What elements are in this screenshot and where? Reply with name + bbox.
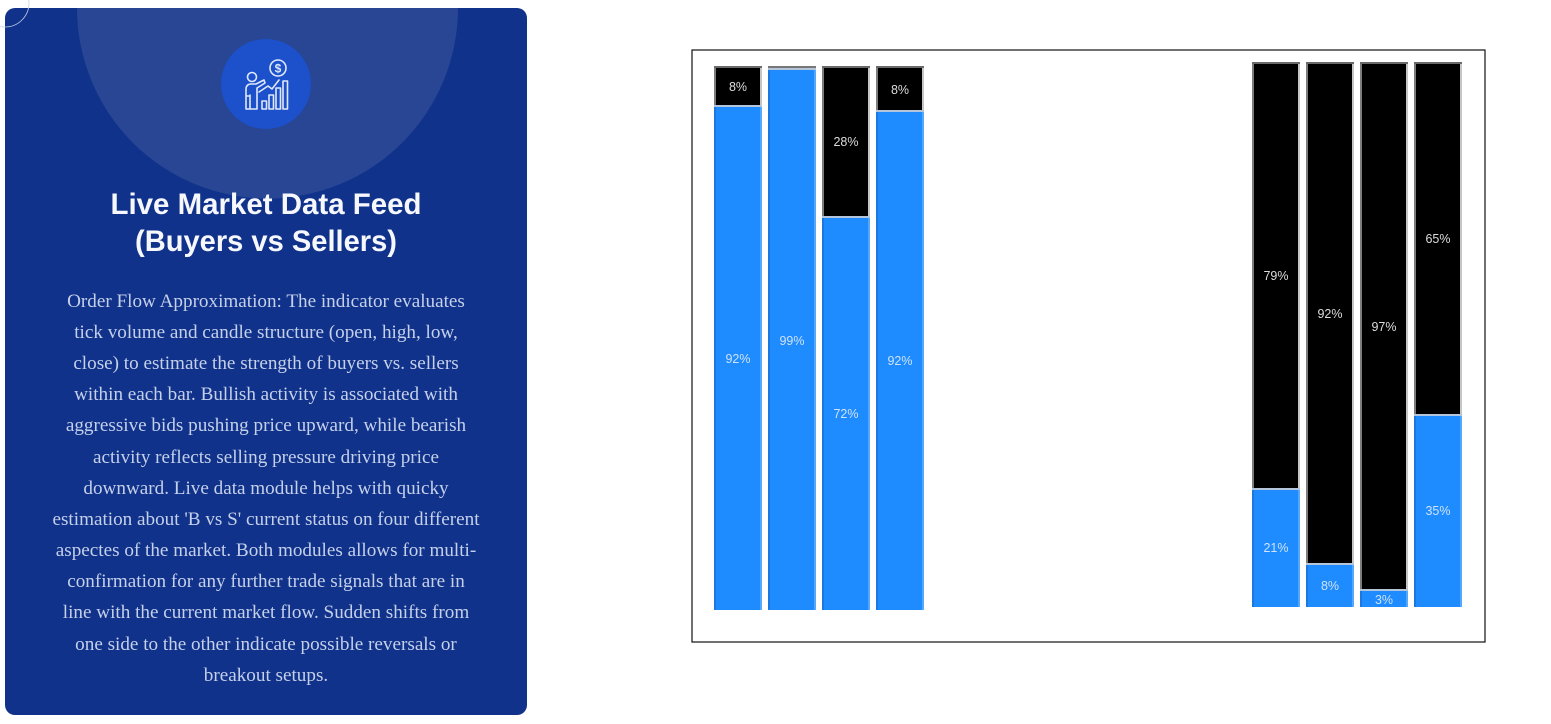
description text: within each bar. Bullish activity is associated with	[74, 384, 458, 405]
description text: tick volume and candle structure (open, high, low,	[74, 322, 458, 343]
bar 4: 92% buyers, 8% sellers: 8%	[891, 83, 909, 97]
bar 3: 72% buyers, 28% sellers: 28%	[833, 135, 859, 149]
description text: Order Flow Approximation: The indicator evaluates	[67, 291, 465, 312]
description text: downward. Live data module helps with quicky	[83, 478, 449, 499]
bar 2: 99% buyers	[768, 66, 816, 610]
title: (Buyers vs Sellers)	[135, 225, 397, 258]
description text: estimation about 'B vs S' current status on four different	[52, 509, 480, 530]
description text: activity reflects selling pressure driving price	[93, 447, 439, 468]
chart: left buyers vs sellers bars	[714, 66, 924, 610]
bar 7: 3% buyers, 97% sellers: 3%	[1375, 593, 1393, 607]
description text: one side to the other indicate possible reversals or	[75, 634, 457, 655]
bar 5: 21% buyers, 79% sellers: 21%	[1263, 541, 1289, 555]
bar 4: 92% buyers, 8% sellers	[876, 66, 924, 610]
bar 5: 21% buyers, 79% sellers	[1252, 62, 1300, 607]
bar 1: 92% buyers, 8% sellers	[714, 66, 762, 610]
description text: line with the current market flow. Sudden shifts from	[63, 602, 469, 623]
bar 8: 35% buyers, 65% sellers	[1414, 62, 1462, 607]
title	[110, 188, 422, 258]
bar 7: 3% buyers, 97% sellers	[1360, 62, 1408, 607]
bar 3: 72% buyers, 28% sellers	[822, 66, 870, 610]
icon: investor with growth chart	[221, 39, 311, 129]
description text: aspectes of the market. Both modules allows for multi-	[56, 540, 476, 561]
bar 6: 8% buyers, 92% sellers: 92%	[1317, 307, 1343, 321]
bar 3: 72% buyers, 28% sellers: 72%	[833, 407, 859, 421]
panel: description	[0, 0, 527, 715]
title: Live Market Data Feed	[110, 188, 422, 221]
description text: aggressive bids pushing price upward, while bearish	[66, 415, 467, 436]
chart frame	[692, 50, 1485, 642]
description text	[52, 291, 480, 686]
bar 7: 3% buyers, 97% sellers: 97%	[1371, 320, 1397, 334]
bar 6: 8% buyers, 92% sellers: 8%	[1321, 579, 1339, 593]
bar 2: 99% buyers: 99%	[779, 334, 805, 348]
bar 5: 21% buyers, 79% sellers: 79%	[1263, 269, 1289, 283]
bar 6: 8% buyers, 92% sellers	[1306, 62, 1354, 607]
bar 8: 35% buyers, 65% sellers: 35%	[1425, 504, 1451, 518]
description text: breakout setups.	[204, 665, 328, 686]
bar 4: 92% buyers, 8% sellers: 92%	[887, 354, 913, 368]
description text: confirmation for any further trade signals that are in	[67, 571, 465, 592]
icon: investor with growth chart: $	[275, 62, 282, 76]
bar 1: 92% buyers, 8% sellers: 8%	[729, 80, 747, 94]
chart: right buyers vs sellers bars	[1252, 62, 1462, 607]
bar 1: 92% buyers, 8% sellers: 92%	[725, 352, 751, 366]
bar 8: 35% buyers, 65% sellers: 65%	[1425, 232, 1451, 246]
description text: close) to estimate the strength of buyers vs. sellers	[73, 353, 459, 374]
